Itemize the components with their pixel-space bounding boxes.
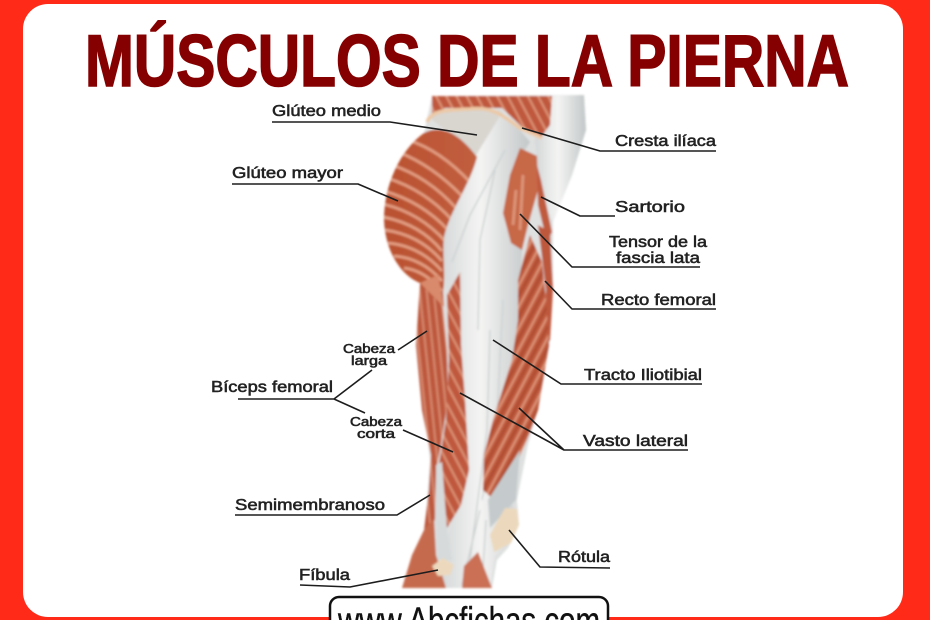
iliotibial tract (440, 116, 530, 588)
calf muscle (402, 518, 446, 588)
label: Rótula: Rótula (558, 549, 610, 566)
iliac crest (427, 109, 542, 138)
tract fibres (452, 150, 505, 585)
tensor highlights (513, 175, 523, 230)
label: Cabeza corta (350, 415, 402, 441)
label: Tracto Iliotibial: Tracto Iliotibial (584, 367, 702, 384)
tensor fasciae latae (503, 148, 538, 250)
leg muscle illustration (380, 95, 586, 588)
lower centre muscle (462, 552, 492, 588)
sartorius (537, 165, 552, 242)
label: Glúteo medio: Glúteo medio (272, 103, 381, 120)
label: Semimembranoso: Semimembranoso (235, 497, 385, 514)
label: Cabeza larga (343, 342, 395, 368)
patella (490, 508, 519, 552)
vastus lateralis (483, 235, 549, 498)
label: Recto femoral: Recto femoral (601, 292, 716, 309)
label: Cabeza corta: Cabeza (350, 415, 402, 429)
gluteus maximus (380, 120, 480, 310)
label: Fíbula: Fíbula (299, 567, 350, 584)
leader lines (232, 122, 716, 587)
fibula head (432, 558, 454, 576)
label: Vasto lateral: Vasto lateral (583, 433, 688, 450)
biceps femoris short head (438, 272, 469, 528)
label: Tensor de la fascia lata: Tensor de la (609, 234, 707, 251)
label: Cresta ilíaca: Cresta ilíaca (615, 133, 716, 150)
lower tendon (436, 462, 452, 560)
upper abdominal muscle band (432, 96, 552, 137)
lateral knee tissue (488, 450, 520, 528)
rectus femoris (538, 225, 553, 350)
label: Tensor de la fascia lata: fascia lata (616, 250, 700, 267)
label: Cabeza larga: larga (351, 354, 387, 368)
label: Tensor de la fascia lata (609, 234, 707, 267)
label: Cabeza corta: corta (357, 427, 395, 441)
gluteus medius fascia (430, 110, 510, 165)
label: Sartorio: Sartorio (615, 199, 685, 216)
label: Bíceps femoral: Bíceps femoral (211, 379, 333, 396)
hip fascia, right side (535, 95, 586, 222)
label: Cabeza larga: Cabeza (343, 342, 395, 356)
leg silhouette base (384, 95, 586, 588)
biceps femoris long head (416, 283, 448, 530)
label: Glúteo mayor: Glúteo mayor (232, 165, 343, 182)
